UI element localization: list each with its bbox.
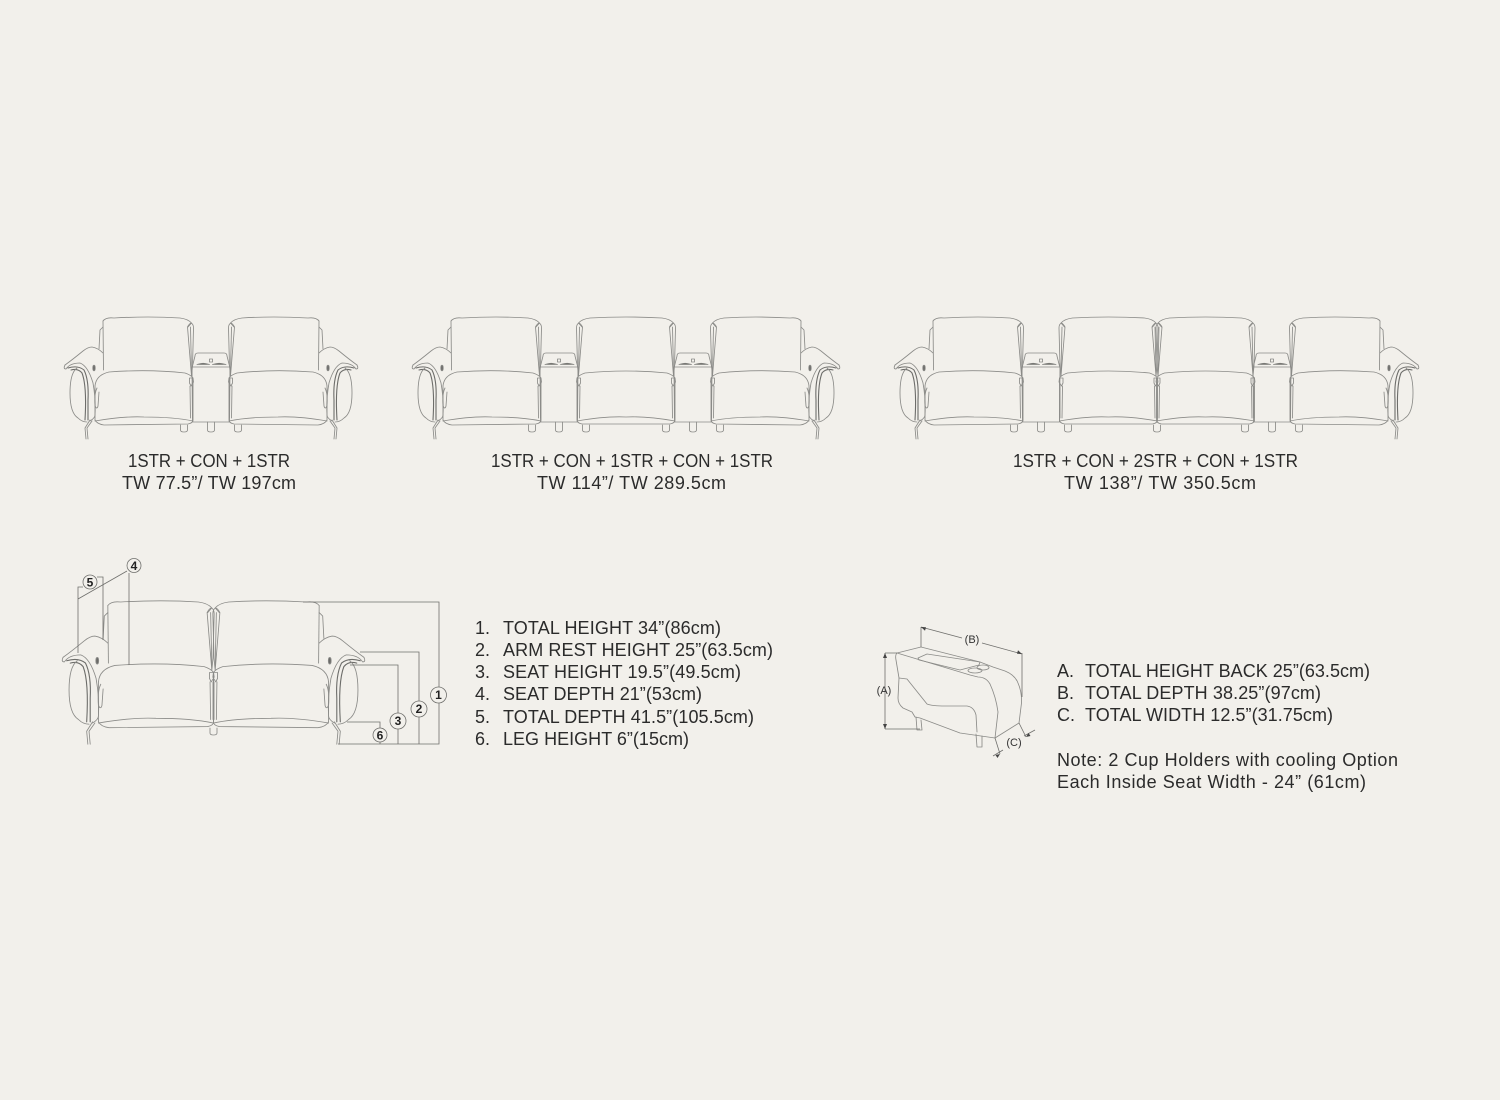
callout 1 <box>430 687 446 703</box>
sofa dimension list <box>475 618 773 749</box>
console dimension list: TOTAL HEIGHT BACK 25”(63.5cm) <box>1085 661 1370 681</box>
callout lines <box>78 571 439 744</box>
console outline <box>896 647 1022 747</box>
console dimension list: TOTAL DEPTH 38.25”(97cm) <box>1085 683 1321 703</box>
sofa dimension list: ARM REST HEIGHT 25”(63.5cm) <box>503 640 773 660</box>
label: 1STR + CON + 1STR + CON + 1STR: 1STR + CON + 1STR + CON + 1STR <box>491 451 773 471</box>
label: 1STR + CON + 1STR + CON + 1STR: TW 114”/ TW 289.5cm <box>537 473 726 493</box>
sofa dimension list: 3. <box>475 662 490 682</box>
console dimension list <box>1057 661 1370 725</box>
callout 5: 5 <box>87 576 94 590</box>
diagram: sofa dimensions with callouts <box>62 558 447 744</box>
sofa dimension list: SEAT DEPTH 21”(53cm) <box>503 684 702 704</box>
callout 1: 1 <box>435 688 442 702</box>
label C: (C) <box>1006 737 1022 749</box>
label: 1STR + CON + 1STR + CON + 1STR <box>491 451 773 493</box>
sofa dimension list: TOTAL HEIGHT 34”(86cm) <box>503 618 721 638</box>
note: Each Inside Seat Width - 24” (61cm) <box>1057 772 1366 792</box>
diagram: console dimensions <box>877 627 1035 758</box>
label B: (B) <box>965 634 979 646</box>
label: 1STR + CON + 1STR <box>122 451 296 493</box>
console dimension list: C. <box>1057 705 1075 725</box>
callout 4 <box>127 558 141 573</box>
sofa dimension list: 5. <box>475 707 490 727</box>
dimension arrowheads <box>883 627 1030 758</box>
dimension lines <box>885 627 1035 756</box>
sofa dimension list: 1. <box>475 618 490 638</box>
label: 1STR + CON + 2STR + CON + 1STR: 1STR + CON + 2STR + CON + 1STR <box>1013 451 1298 471</box>
sofa dimension list: SEAT HEIGHT 19.5”(49.5cm) <box>503 662 741 682</box>
callout 4: 4 <box>131 559 138 573</box>
callout 6 <box>373 728 387 742</box>
sofa: 1STR + CON + 1STR + CON + 1STR <box>412 317 840 439</box>
sofa dimension list: 2. <box>475 640 490 660</box>
callout 2 <box>411 701 427 717</box>
label: 1STR + CON + 1STR: 1STR + CON + 1STR <box>128 451 290 471</box>
label: 1STR + CON + 2STR + CON + 1STR: TW 138”/ TW 350.5cm <box>1064 473 1256 493</box>
callout 6: 6 <box>377 728 384 742</box>
sofa dimension list: LEG HEIGHT 6”(15cm) <box>503 729 689 749</box>
sofa front view <box>62 601 365 744</box>
callout 3: 3 <box>395 714 402 728</box>
sofa dimension list: 6. <box>475 729 490 749</box>
note <box>1057 750 1398 792</box>
console dimension list: A. <box>1057 661 1074 681</box>
callout 3 <box>390 713 406 729</box>
callout 2: 2 <box>416 702 423 716</box>
label: 1STR + CON + 1STR: TW 77.5”/ TW 197cm <box>122 473 296 493</box>
console dimension list: B. <box>1057 683 1074 703</box>
sofa dimension list: 4. <box>475 684 490 704</box>
callout 5 <box>83 575 97 590</box>
label A: (A) <box>877 685 891 697</box>
sofa dimension list: TOTAL DEPTH 41.5”(105.5cm) <box>503 707 754 727</box>
note: Note: 2 Cup Holders with cooling Option <box>1057 750 1398 770</box>
console dimension list: TOTAL WIDTH 12.5”(31.75cm) <box>1085 705 1333 725</box>
sofa: 1STR + CON + 1STR <box>64 317 358 439</box>
sofa: 1STR + CON + 2STR + CON + 1STR <box>894 317 1419 439</box>
label: 1STR + CON + 2STR + CON + 1STR <box>1013 451 1298 493</box>
